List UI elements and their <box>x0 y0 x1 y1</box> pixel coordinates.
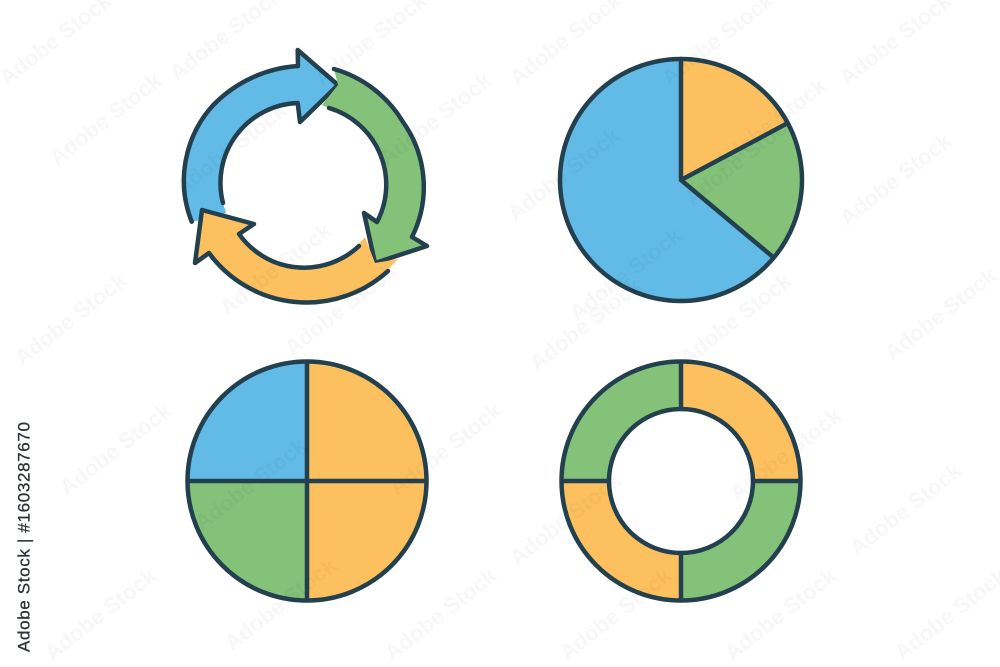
icon: cycle arrows <box>184 50 427 302</box>
watermark: Adobe Stock <box>40 562 162 665</box>
watermark: Adobe Stock <box>835 127 957 230</box>
watermark: Adobe Stock <box>725 402 847 505</box>
watermark: Adobe Stock <box>375 67 497 170</box>
watermark: Adobe Stock <box>380 562 502 665</box>
watermark: Adobe Stock <box>10 267 132 370</box>
watermark: Adobe Stock <box>170 97 292 200</box>
watermark: Adobe Stock <box>565 222 687 325</box>
watermark: Adobe Stock <box>503 122 625 225</box>
watermark: Adobe Stock <box>215 217 337 320</box>
watermark: Adobe Stock <box>880 262 1000 365</box>
blue arrow <box>184 50 338 222</box>
watermark: Adobe Stock <box>220 552 342 655</box>
stock id label: Adobe Stock | #1603287670 <box>14 422 34 652</box>
watermark: Adobe Stock <box>385 397 507 500</box>
watermark: Adobe Stock <box>720 562 842 665</box>
watermark: Adobe Stock <box>675 267 797 370</box>
quartered pie chart <box>188 362 426 600</box>
pie chart <box>559 59 802 301</box>
watermark: Adobe Stock <box>845 457 967 560</box>
watermark: Adobe Stock <box>190 432 312 535</box>
donut chart <box>562 362 800 600</box>
watermark: Adobe Stock <box>280 257 402 360</box>
orange arrow <box>195 210 398 302</box>
watermark: Adobe Stock <box>55 397 177 500</box>
watermark: Adobe Stock <box>680 107 802 210</box>
watermark: Adobe Stock <box>555 562 677 665</box>
watermark: Adobe Stock <box>505 467 627 570</box>
watermark: Adobe Stock <box>525 272 647 375</box>
watermark: Adobe Stock <box>710 72 832 175</box>
watermark: Adobe Stock <box>45 67 167 170</box>
green arrow <box>322 69 427 263</box>
